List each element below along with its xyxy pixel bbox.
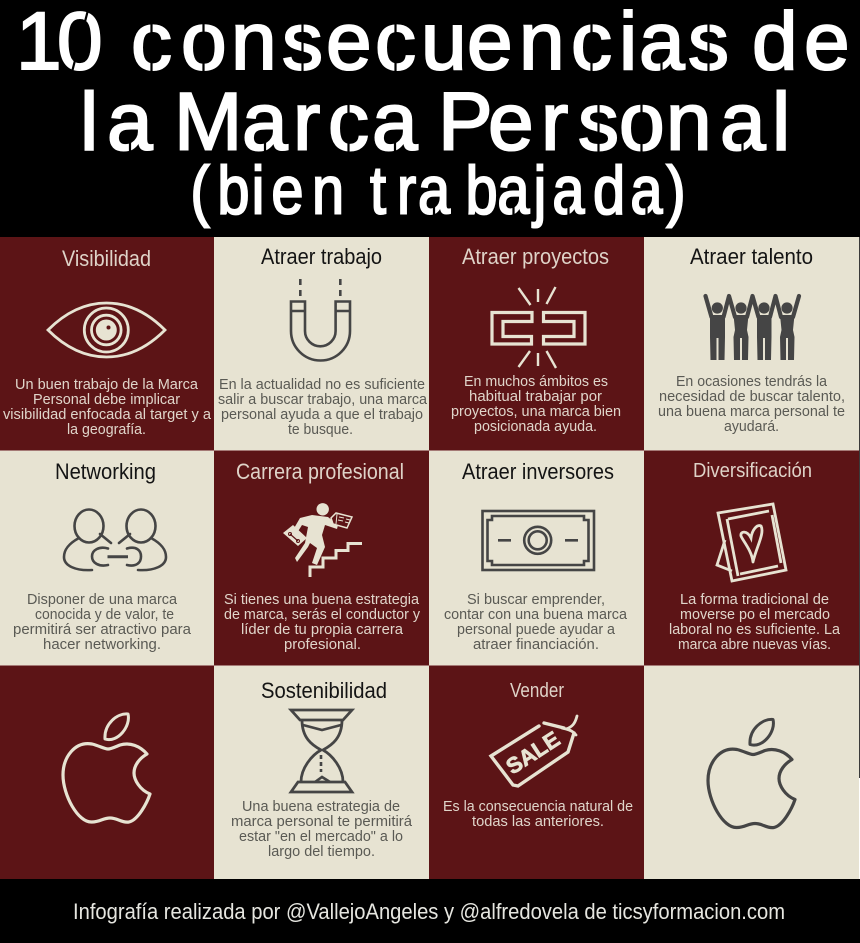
panel: apple right <box>708 719 795 828</box>
grid background <box>0 237 860 879</box>
panel: Atraer inversores: atraer financiación. <box>473 636 599 653</box>
icon: banknote <box>482 511 594 570</box>
icon: hourglass <box>291 710 352 792</box>
panel: Sostenibilidad: largo del tiempo. <box>268 843 375 860</box>
panel: Vender: todas las anteriores. <box>472 813 604 830</box>
icon: group of people <box>706 296 799 360</box>
panel: Atraer proyectos: proyectos, una marca bien <box>451 403 621 420</box>
panel: Networking: hacer networking. <box>43 636 161 653</box>
panel: Atraer trabajo <box>218 244 428 438</box>
panel: Diversificación <box>669 460 841 653</box>
panel: Visibilidad: Un buen trabajo de la Marca <box>15 376 199 393</box>
panel: Atraer talento: Atraer talento <box>690 244 813 269</box>
panel: Atraer trabajo: salir a buscar trabajo, una marca <box>218 391 428 408</box>
panel: Networking: Disponer de una marca <box>27 591 178 608</box>
panel: Atraer inversores <box>444 459 628 653</box>
icon: sale tag <box>491 716 577 786</box>
panel: Carrera profesional: líder de tu propia carrera <box>241 621 404 638</box>
panel: apple left <box>63 714 150 822</box>
panel: Carrera profesional: Si tienes una buena estrategia <box>224 591 420 608</box>
panel: Atraer inversores: contar con una buena marca <box>444 606 628 623</box>
panel: Atraer talento: necesidad de buscar talento, <box>659 388 845 405</box>
icon: man climbing stairs <box>283 503 362 577</box>
panel: Atraer inversores: Atraer inversores <box>462 459 614 484</box>
panel: Networking: Networking <box>55 459 156 484</box>
icon: picture frame with heart <box>717 504 786 581</box>
panel: Sostenibilidad <box>231 678 413 860</box>
panel: Atraer talento: En ocasiones tendrás la <box>676 373 828 390</box>
title: la Marca Personal <box>80 76 790 168</box>
panel: Sostenibilidad: estar "en el mercado" a lo <box>239 828 403 845</box>
panel: Sostenibilidad: Una buena estrategia de <box>242 798 400 815</box>
panel: Visibilidad: visibilidad enfocada al target y a <box>3 406 212 423</box>
panel: Carrera profesional: Carrera profesional <box>236 459 404 484</box>
icon: broken chain <box>492 287 585 368</box>
panel: Atraer talento: una buena marca personal te <box>658 403 845 420</box>
panel: Networking <box>13 459 192 653</box>
panel: Carrera profesional: profesional. <box>284 636 361 653</box>
panel: Vender: Vender <box>510 680 564 702</box>
panel: Vender: Es la consecuencia natural de <box>443 798 633 815</box>
panel: Visibilidad: Personal debe implicar <box>33 391 180 408</box>
panel: Networking: conocida y de valor, te <box>35 606 174 623</box>
icon: apple outline dark <box>708 719 795 828</box>
panel: Atraer proyectos: habitual trabajar por <box>469 388 602 405</box>
panel: Atraer proyectos: Atraer proyectos <box>462 244 609 269</box>
panel: Visibilidad <box>3 246 212 438</box>
title <box>16 0 850 229</box>
panel: Atraer proyectos <box>451 244 621 435</box>
panel: Atraer inversores: Si buscar emprender, <box>467 591 605 608</box>
title: (bien trabajada) <box>190 153 686 229</box>
panel: Atraer proyectos: posicionada ayuda. <box>474 418 597 435</box>
panel: Atraer proyectos: En muchos ámbitos es <box>464 373 608 390</box>
panel: Diversificación: Diversificación <box>693 460 812 482</box>
panel: Diversificación: laboral no es suficiente. La <box>669 621 841 638</box>
panel: Networking: permitirá ser atractivo para <box>13 621 192 638</box>
icon: magnet <box>291 279 350 360</box>
panel: Diversificación: La forma tradicional de <box>680 591 829 608</box>
panel: Atraer inversores: personal puede ayudar a <box>457 621 616 638</box>
panel: Atraer trabajo: personal ayuda a que el trabajo <box>221 406 423 423</box>
panel: Vender <box>443 680 633 830</box>
panel: Diversificación: moverse po el mercado <box>680 606 830 623</box>
panel: Sostenibilidad: Sostenibilidad <box>261 678 387 703</box>
panel: Visibilidad: Visibilidad <box>62 246 151 271</box>
panel: Atraer trabajo: te busque. <box>288 421 353 438</box>
footer credit: Infografía realizada por @VallejoAngeles y @alfredovela de ticsyformacion.com <box>73 899 785 924</box>
panel: Carrera profesional <box>224 459 420 653</box>
panel: Atraer trabajo: Atraer trabajo <box>261 244 382 269</box>
icon: apple outline <box>63 714 150 822</box>
panel: Visibilidad: la geografía. <box>67 421 146 438</box>
panel: Sostenibilidad: marca personal te permitirá <box>231 813 413 830</box>
icon: sale tag: SALE <box>501 726 564 779</box>
panel: Atraer trabajo: En la actualidad no es suficiente <box>219 376 425 393</box>
panel: Atraer talento <box>658 244 845 435</box>
panel: Atraer talento: ayudará. <box>724 418 779 435</box>
panel: Diversificación: marca abre nuevas vías. <box>678 636 831 653</box>
panel: Carrera profesional: de marca, serás el conductor y <box>224 606 420 623</box>
icon: eye <box>48 303 165 357</box>
icon: two people handshake <box>64 510 166 570</box>
